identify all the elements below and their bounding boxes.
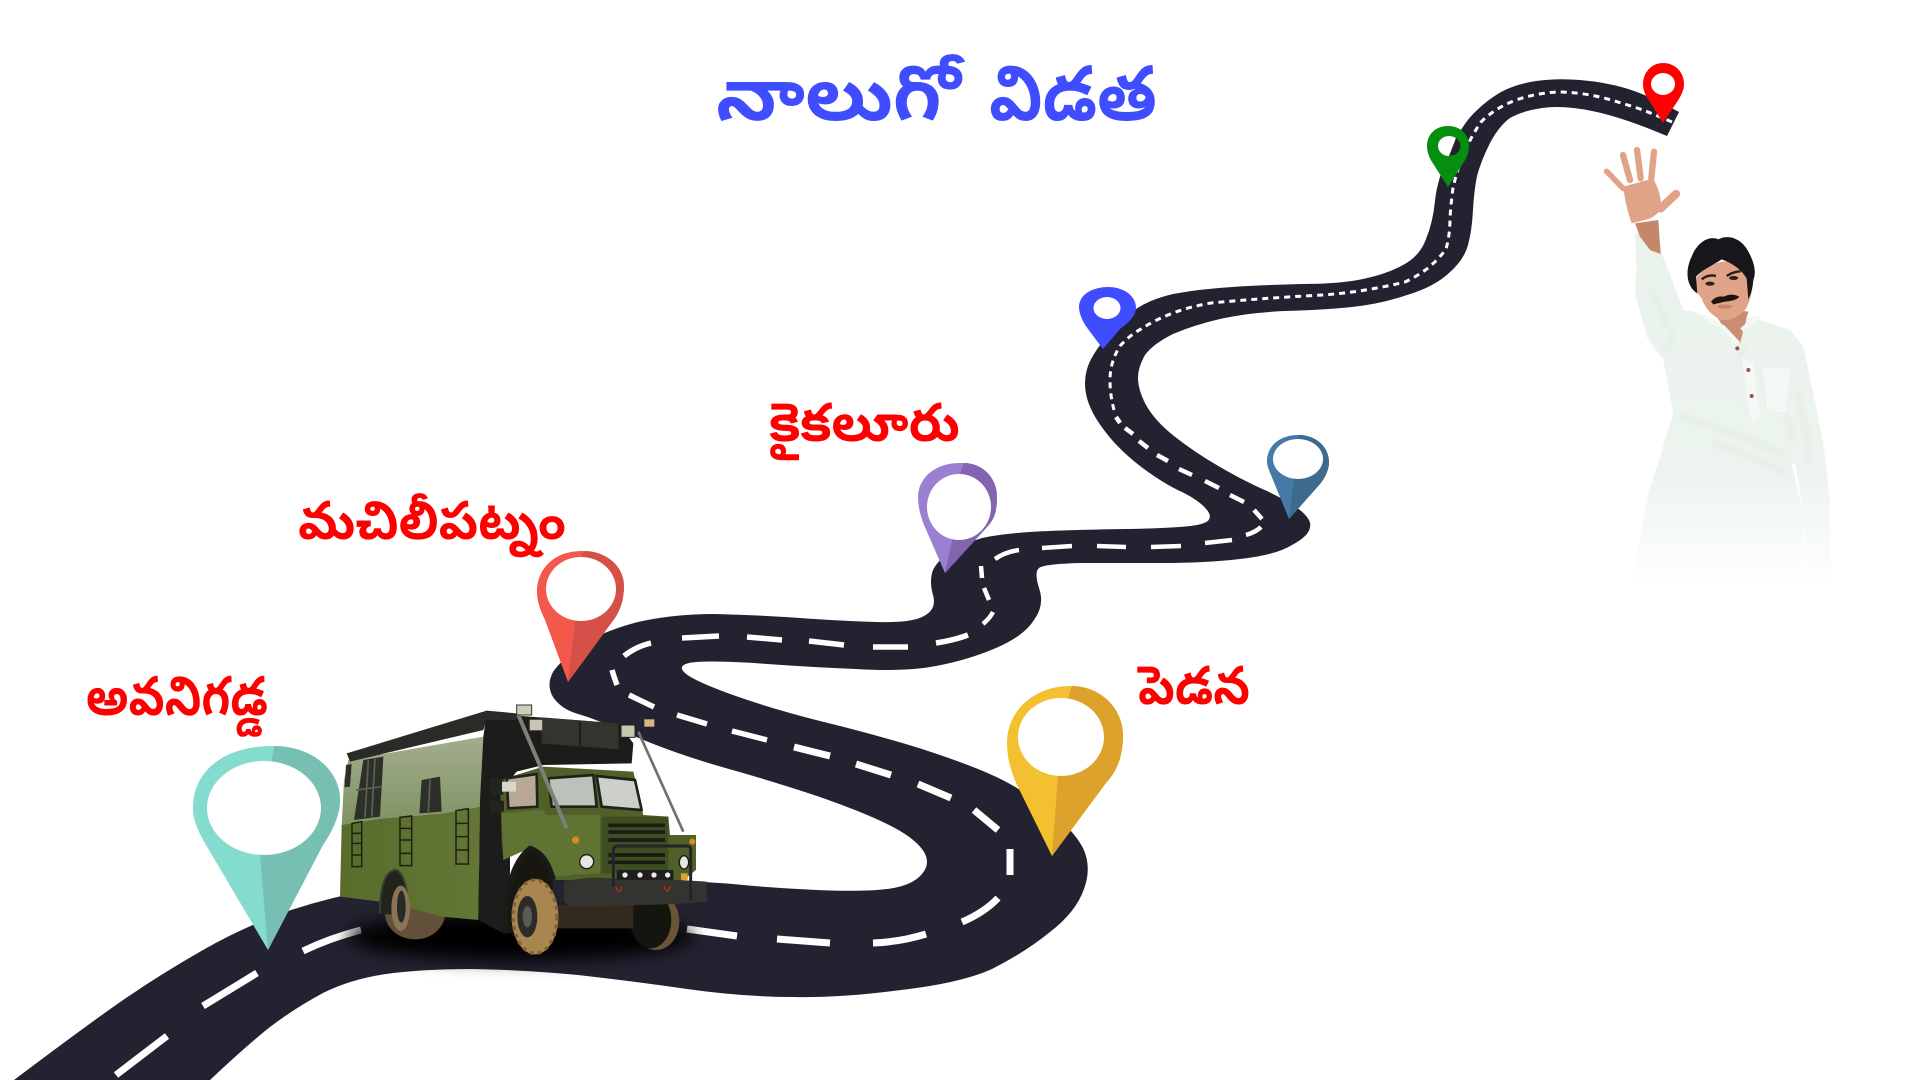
truck side ladders (352, 809, 468, 867)
face (1695, 261, 1753, 320)
arm and body gap (1792, 463, 1807, 597)
truck box windows (345, 757, 442, 820)
pin: yellow Pedana (1007, 686, 1123, 856)
kurta (1630, 230, 1835, 597)
truck box upper side (342, 737, 483, 827)
truck bumper (564, 846, 707, 907)
label: Machilipatnam: మచిలీపట్నం (298, 492, 566, 558)
truck cab door and fender panel (502, 810, 600, 877)
campaign truck (340, 705, 707, 960)
truck windshield (548, 775, 642, 810)
label: Pedana: పెడన (1137, 657, 1250, 716)
truck shadow (347, 913, 693, 960)
truck dark front of box (478, 713, 633, 933)
truck undercarriage (557, 905, 633, 928)
truck front wheel arch (505, 848, 553, 933)
truck mirrors (490, 778, 516, 812)
Pawan figure waving (1607, 150, 1835, 597)
waving hand (1607, 150, 1676, 254)
neck (1710, 307, 1748, 343)
pin: red destination (1643, 63, 1684, 123)
eyebrows (1702, 271, 1741, 279)
pin: steel blue (1267, 435, 1329, 519)
pin: coral Machilipatnam (537, 551, 624, 682)
truck door window (507, 774, 537, 808)
label: Avanigadda: అవనిగడ్డ (86, 667, 268, 737)
kurta placket (1742, 357, 1760, 425)
title: నాలుగో (716, 52, 966, 137)
lips (1718, 305, 1732, 309)
kurta fold shading (1647, 287, 1810, 473)
pin: green (1427, 126, 1469, 187)
truck cab body (500, 767, 696, 880)
truck hood grille (602, 817, 668, 873)
truck side mirror poles and lamps (517, 705, 683, 832)
pin: teal Avanigadda (193, 746, 340, 950)
truck roof rack (347, 711, 517, 762)
collar (1703, 316, 1755, 343)
truck far right wheel (630, 892, 679, 950)
truck rear wheel (385, 887, 445, 939)
kurta buttons (1720, 324, 1754, 398)
truck top grille (542, 717, 618, 749)
hair (1688, 237, 1755, 299)
truck box lower side (340, 807, 480, 920)
kurta pocket (1762, 367, 1792, 413)
truck headlights (572, 836, 695, 869)
truck rear wheel arch (380, 870, 410, 931)
label: Kaikaluru: కైకలూరు (769, 394, 960, 461)
truck front wheel (512, 879, 558, 954)
pin: blue (1079, 287, 1136, 349)
mustache (1711, 295, 1739, 304)
title (716, 52, 1157, 137)
title: విడత (989, 52, 1157, 137)
pin: purple Kaikaluru (918, 463, 997, 573)
eyes (1705, 276, 1738, 286)
